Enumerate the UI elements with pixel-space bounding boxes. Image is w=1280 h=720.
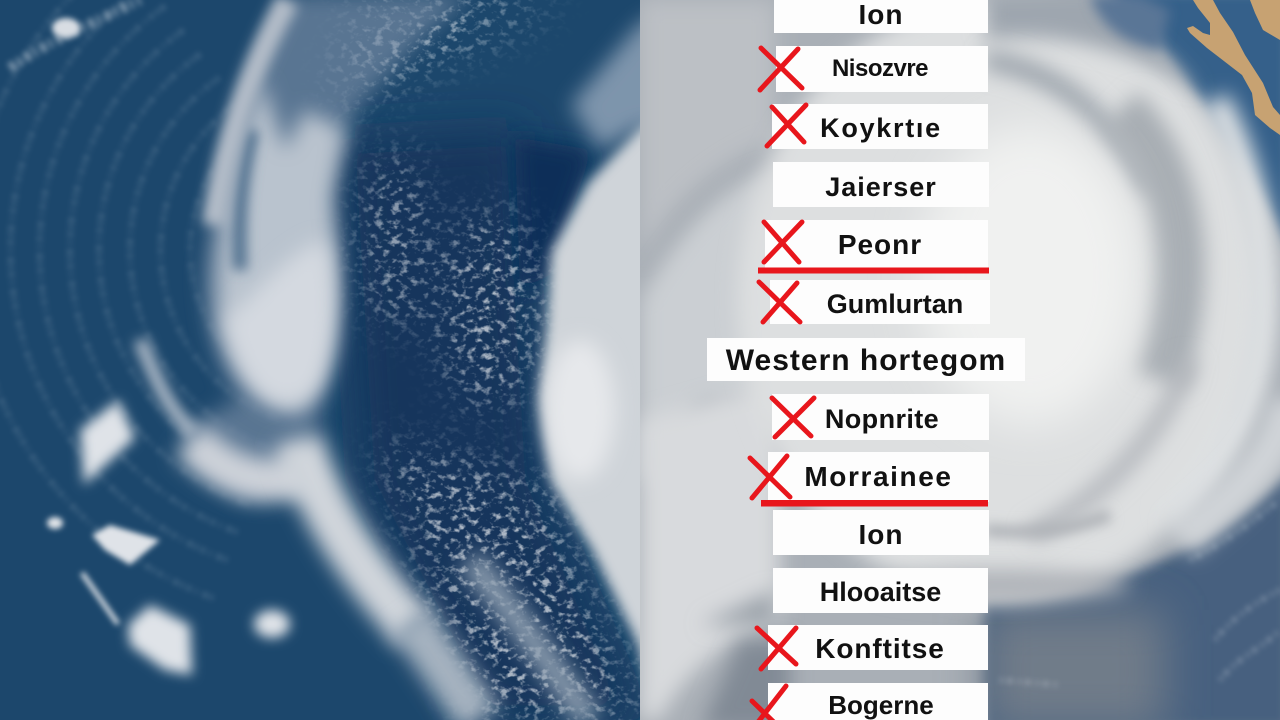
- storm body: [738, 0, 1262, 600]
- cross: Gumlurtan: [759, 282, 800, 322]
- cross: Nisozvre: [760, 48, 802, 90]
- cross: Bogerne: [752, 686, 786, 720]
- cloud specks lower right: [1000, 500, 1280, 685]
- name: Ion: Ion: [858, 519, 904, 550]
- name: Hlooaitse: [773, 568, 988, 613]
- name: Bogerne: Bogerne: [828, 690, 934, 720]
- name: Jaierser: [773, 162, 989, 207]
- name: Konftitse: Konftitse: [815, 633, 945, 664]
- name: Bogerne: [768, 683, 988, 720]
- small clouds lower-left: [47, 400, 290, 675]
- cross: Konftitse: [757, 628, 796, 669]
- name: Nisozvre: Nisozvre: [832, 55, 928, 82]
- top storm shade and gray spiral bands: [985, 0, 1200, 90]
- name: Ion: [774, 0, 988, 33]
- name: Western hortegom: Western hortegom: [726, 344, 1006, 377]
- right half: hurricane: [640, 0, 1280, 720]
- name: Hlooaitse: Hlooaitse: [820, 577, 941, 607]
- name: Koykrtıe: Koykrtıe: [820, 112, 942, 142]
- name: Koykrtıe: [772, 104, 988, 149]
- top-left cloud strand: [10, 0, 140, 68]
- left cyclone cloud mass: [140, 0, 590, 720]
- name: Jaierser: Jaierser: [825, 172, 937, 202]
- right cloud edge on left panel: [528, 10, 640, 691]
- left half: ocean and clouds: [0, 0, 640, 720]
- list: storm names: [707, 0, 1025, 720]
- name: Peonr: [765, 220, 988, 268]
- name: Konftitse: [768, 625, 988, 670]
- name: Peonr: Peonr: [838, 229, 922, 260]
- name: Nopnrite: Nopnrite: [825, 404, 939, 434]
- name: Gumlurtan: [770, 280, 990, 324]
- left side shading: [640, 0, 775, 260]
- name: Ion: [773, 510, 989, 555]
- cross: Nopnrite: [772, 398, 814, 437]
- name: Western hortegom: [707, 338, 1025, 381]
- land: [1187, 0, 1280, 135]
- underline: Peonr: [758, 268, 989, 274]
- cross: Peonr: [764, 222, 802, 262]
- name: Nisozvre: [776, 46, 988, 92]
- name: Nopnrite: [772, 394, 989, 440]
- name: Morrainee: Morrainee: [804, 461, 953, 492]
- underline: Morrainee: [761, 500, 988, 506]
- cross: Morrainee: [750, 456, 790, 498]
- cross: Koykrtie: [767, 105, 806, 146]
- dark ocean corners: [1115, 0, 1280, 244]
- name: Morrainee: [768, 452, 989, 502]
- speckled arcs: [0, 0, 243, 600]
- name: Gumlurtan: Gumlurtan: [827, 288, 963, 318]
